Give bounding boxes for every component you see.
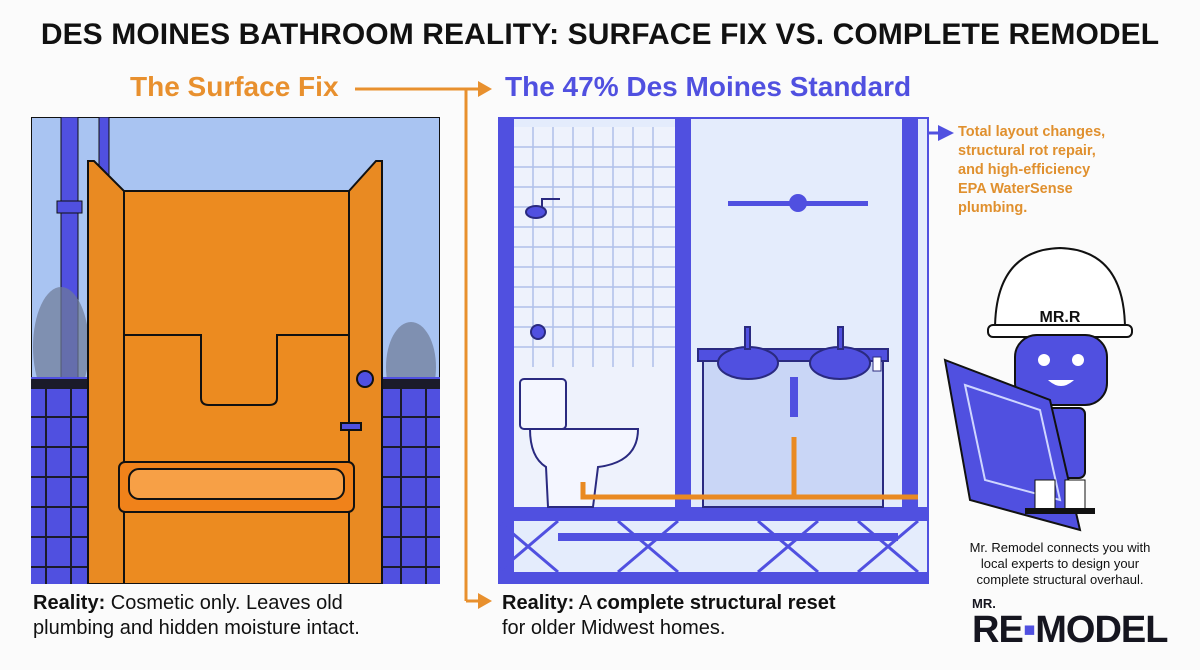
- pipes: [57, 117, 109, 379]
- toilet: [520, 379, 638, 507]
- heading: surface fix: The Surface Fix: [130, 71, 339, 102]
- text: reality left: [33, 592, 360, 639]
- shower surround: [88, 161, 382, 584]
- text: mascot caption: complete structural overhaul.: [977, 572, 1143, 587]
- text: reality left: Reality: Cosmetic only. Leaves old: [33, 592, 343, 614]
- vanity: [698, 327, 888, 507]
- text: reality right: Reality: A complete structural reset: [502, 592, 835, 614]
- panel: surface fix illustration: [31, 117, 440, 584]
- text: reality right: [502, 592, 836, 639]
- callout: remodel details: Total layout changes,: [958, 124, 1105, 140]
- logo: RE▪MODEL: [972, 609, 1168, 651]
- callout: remodel details: [958, 124, 1105, 216]
- text: reality right: for older Midwest homes.: [502, 617, 725, 639]
- callout: remodel details: EPA WaterSense: [958, 181, 1073, 197]
- text: mascot caption: Mr. Remodel connects you with: [970, 540, 1150, 555]
- logo: MR.: [972, 596, 996, 611]
- mirror light: [728, 201, 868, 206]
- text: mascot caption: local experts to design your: [981, 556, 1139, 571]
- shower tiles: [512, 127, 677, 507]
- callout: remodel details: plumbing.: [958, 200, 1027, 216]
- tiles: [31, 377, 440, 584]
- walls and frame: [498, 117, 929, 584]
- callout: remodel details: and high-efficiency: [958, 162, 1090, 178]
- heading: 47% standard: The 47% Des Moines Standard: [505, 71, 911, 102]
- panel: complete remodel illustration: [498, 117, 929, 584]
- text: mascot caption: [970, 540, 1150, 587]
- callout: remodel details: structural rot repair,: [958, 143, 1096, 159]
- shower head: [526, 199, 560, 339]
- pipes: [583, 437, 918, 497]
- icon: Mr. R mascot: MR.R: [1040, 309, 1081, 326]
- icon: Mr. R mascot: [944, 247, 1133, 532]
- title: DES MOINES BATHROOM REALITY: SURFACE FIX VS. COMPLETE REMODEL: [41, 18, 1159, 51]
- text: reality left: plumbing and hidden moisture intact.: [33, 617, 360, 639]
